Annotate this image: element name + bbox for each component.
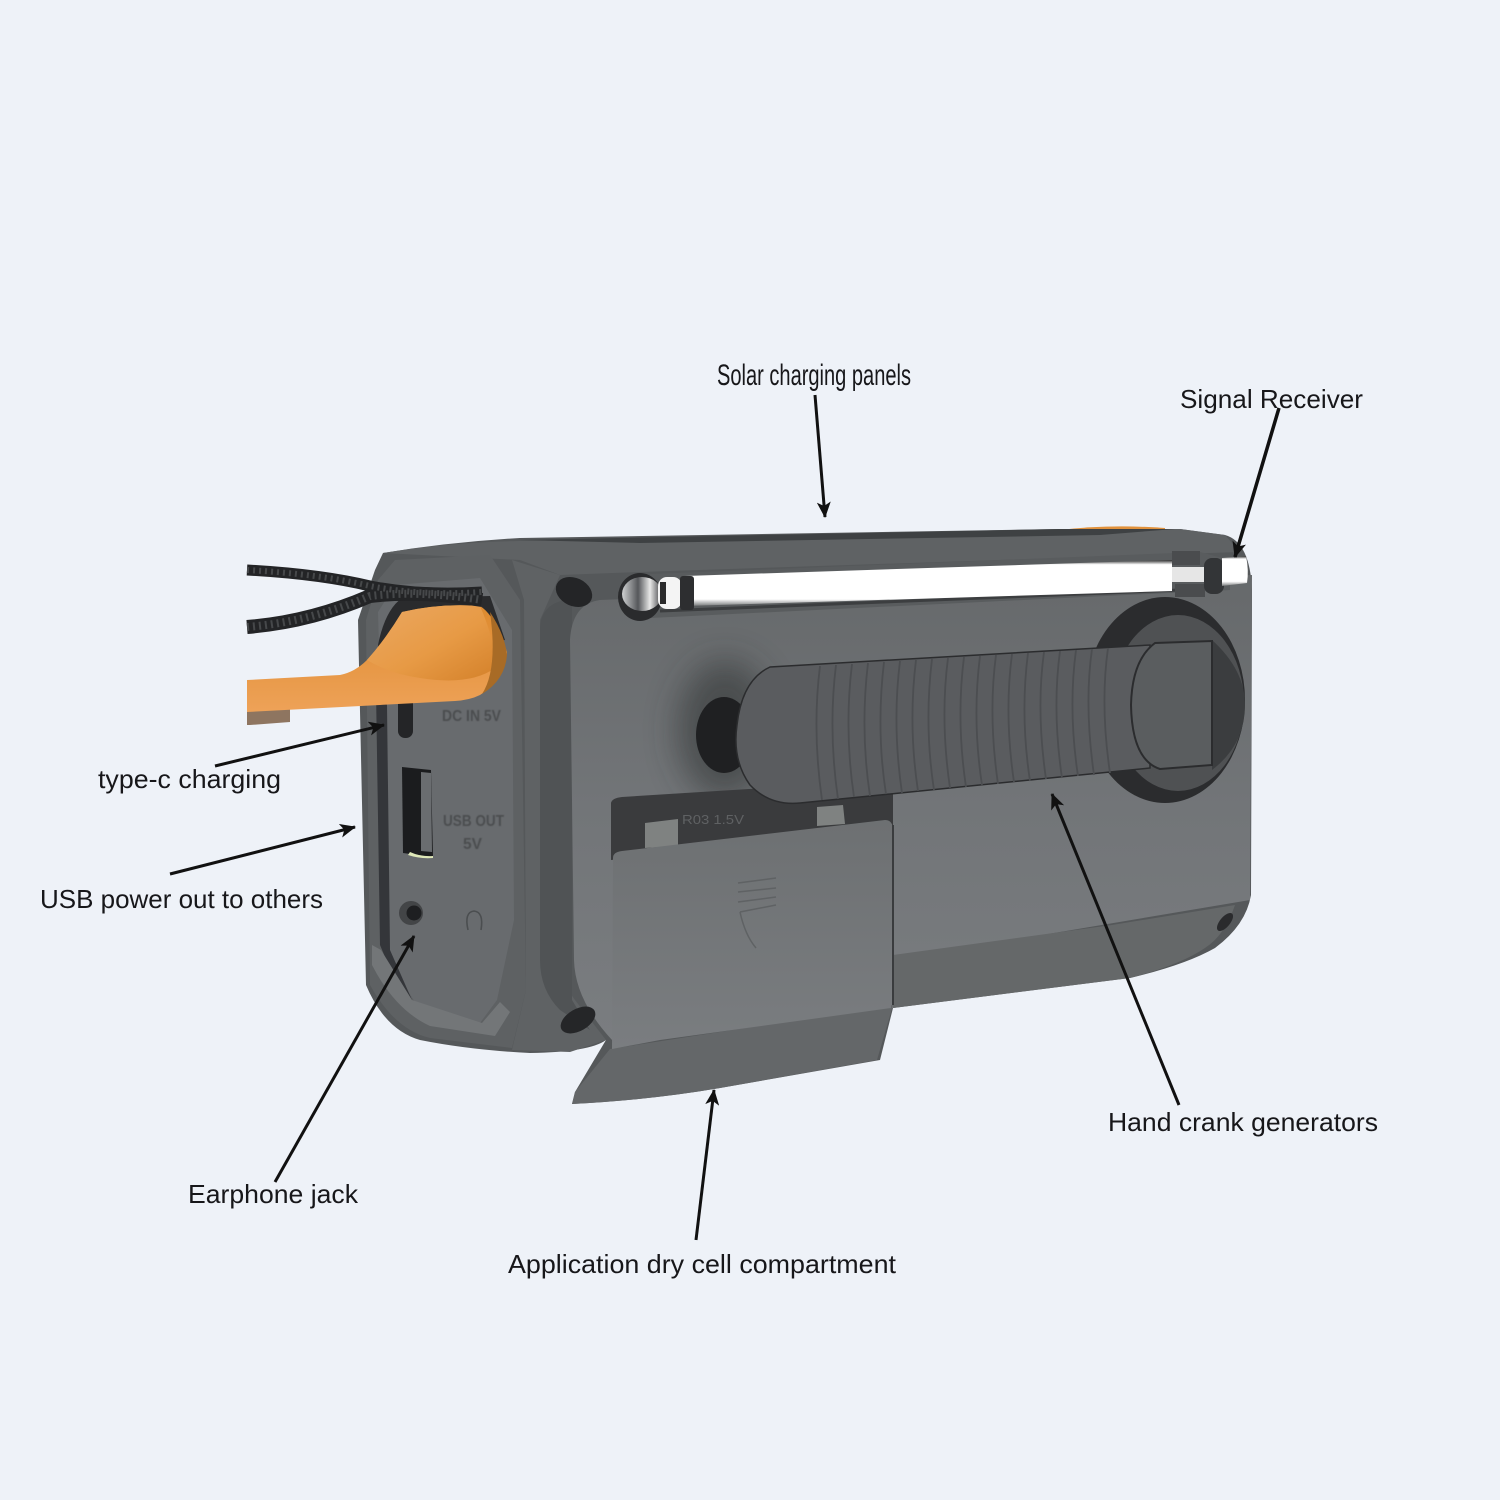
antenna tip: [1222, 556, 1248, 586]
strap edge: [482, 612, 507, 694]
headphone icon: [467, 911, 482, 930]
engraved label USB OUT: USB OUT: [443, 813, 504, 830]
label: earphone jack: Earphone jack: [188, 1179, 359, 1209]
top band: [383, 529, 1240, 575]
dark opening at top: [378, 596, 505, 660]
label: signal receiver: [1180, 384, 1363, 557]
label: solar charging panels: Solar charging panels: [717, 359, 911, 392]
left dark slot: [376, 690, 412, 1000]
label: type-c charging: [98, 725, 384, 794]
strap loop highlight: [367, 605, 495, 680]
label: usb power out: [40, 827, 355, 914]
door lower flap: [572, 1005, 893, 1104]
arrow: dry cell: [696, 1090, 714, 1240]
battery door: [572, 820, 893, 1104]
arrow: usb: [170, 827, 355, 874]
cord lower: [247, 594, 482, 627]
screw hole right: [1214, 910, 1236, 934]
label: dry cell compartment: [508, 1090, 897, 1279]
USB port: [402, 767, 433, 858]
cord weave upper: [247, 570, 482, 593]
antenna left ball: [618, 573, 694, 621]
door edge: [892, 825, 894, 1005]
compartment text: R03 1.5V: [682, 812, 744, 827]
top dark edge: [520, 529, 1175, 543]
handle ribs: [816, 648, 1110, 800]
antenna shadow line: [660, 590, 1180, 611]
door clip left: [645, 819, 678, 848]
arrow: type-c: [215, 725, 384, 766]
crank handle: [736, 645, 1150, 803]
cord weave: [247, 594, 482, 627]
arrow: signal: [1235, 408, 1279, 557]
corner column: [512, 560, 606, 1052]
antenna: [618, 551, 1248, 621]
crank assembly: [696, 597, 1245, 803]
compartment recess: [611, 780, 893, 860]
battery compartment: [611, 780, 893, 860]
front face panel: [570, 575, 1252, 1040]
side ports: [398, 695, 504, 930]
shadow around crank: [677, 660, 773, 800]
strap band: [247, 605, 507, 712]
label: earphone jack: [188, 936, 414, 1209]
cord upper: [247, 570, 482, 593]
label: dry cell compartment: Application dry cell compartment: [508, 1249, 897, 1279]
left face rim: [366, 555, 526, 1048]
arrow: hand crank: [1052, 794, 1179, 1105]
label: type-c charging: type-c charging: [98, 764, 281, 794]
antenna rod: [685, 560, 1172, 606]
lower front band: [893, 905, 1235, 1008]
strap tan end: [247, 708, 290, 725]
screw hole top: [551, 571, 597, 613]
product: radio with open battery door: [247, 526, 1252, 1104]
orange strap: [247, 605, 507, 725]
engraved label DC IN: DC IN 5V: [442, 708, 501, 725]
radio body silhouette: [358, 529, 1252, 1104]
left face inner recess: [378, 578, 514, 1023]
door panel: [612, 820, 893, 1049]
type-c port: [398, 695, 413, 738]
crank block: [1131, 641, 1212, 769]
antenna groove: [650, 552, 1230, 618]
front frame: [540, 600, 590, 1030]
door arrow mark: [738, 878, 776, 948]
black cords: [247, 570, 482, 627]
label: solar charging panels: [717, 359, 911, 517]
orange top accent: [1060, 526, 1165, 534]
screw hole bottom: [556, 1001, 600, 1039]
label: hand crank generators: [1052, 794, 1378, 1137]
label: hand crank generators: Hand crank generators: [1108, 1107, 1378, 1137]
label: signal receiver: Signal Receiver: [1180, 384, 1363, 414]
engraved label 5V: 5V: [463, 836, 482, 853]
door clip right: [817, 805, 845, 826]
antenna right collar: [1172, 551, 1224, 597]
crank knob base: [1085, 597, 1245, 803]
arrow: solar: [815, 395, 825, 517]
earphone jack: [399, 901, 423, 925]
rim bevel bottom: [372, 945, 510, 1036]
label: usb power out: USB power out to others: [40, 884, 323, 914]
crank knob cap: [1112, 615, 1244, 791]
crank pivot left: [696, 697, 752, 773]
arrow: earphone: [275, 936, 414, 1182]
crank knob right shade: [1212, 640, 1245, 770]
